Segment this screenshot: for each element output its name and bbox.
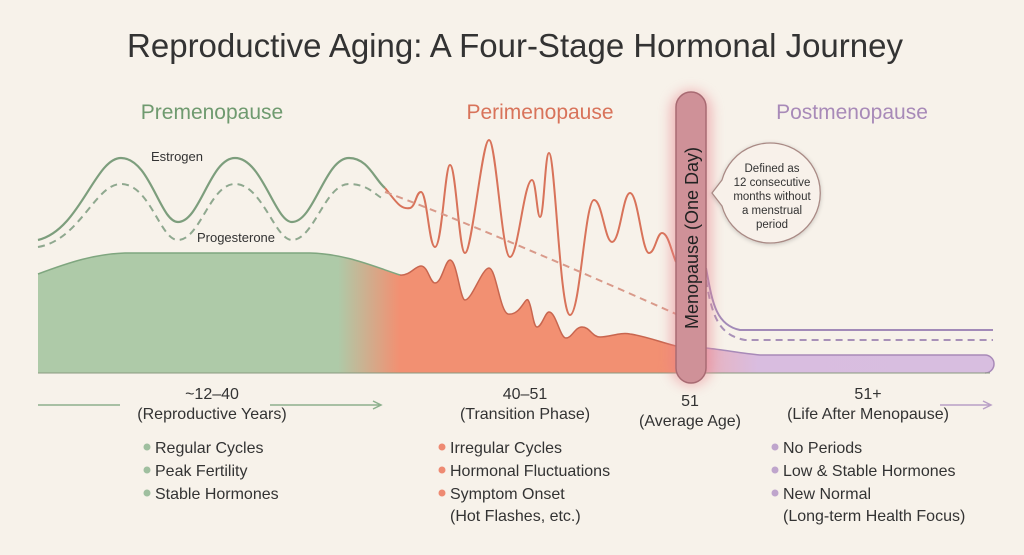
bullets: perimenopause [438,440,610,525]
stage label: perimenopause ages [460,386,590,423]
stage label: perimenopause ages: 40–51 [503,386,547,403]
bullets: premenopause: Peak Fertility [155,463,247,480]
heading: premenopause: Premenopause [141,101,283,124]
bullets: premenopause: Stable Hormones [155,486,279,503]
stage label: menopause age [639,393,741,430]
bullets: postmenopause: New Normal [783,486,871,503]
menopause bar [670,90,712,386]
heading: postmenopause: Postmenopause [776,101,928,124]
progesterone dashed red [385,192,676,314]
bullets: postmenopause: No Periods [783,440,862,457]
timeline arrow green [38,401,381,409]
timeline arrow purple [940,401,991,409]
title: Reproductive Aging: A Four-Stage Hormonal Journey [127,27,903,64]
stage label: postmenopause ages [787,386,949,423]
label: progesterone: Progesterone [197,230,275,245]
stage label: postmenopause ages: (Life After Menopause) [787,406,949,423]
estrogen line red [385,140,676,315]
callout: a menstrual [742,205,802,217]
bullets: postmenopause [772,440,965,525]
callout [712,143,820,243]
bullets: postmenopause: (Long-term Health Focus) [783,508,965,525]
label: estrogen: Estrogen [151,149,203,164]
stage label: perimenopause ages: (Transition Phase) [460,406,590,423]
callout: period [756,219,788,231]
progesterone fill area [38,253,994,373]
callout: 12 consecutive [734,177,810,189]
postmenopause estrogen line [706,268,993,330]
bullets: perimenopause: Hormonal Fluctuations [450,463,610,480]
stage label: postmenopause ages: 51+ [854,386,882,403]
stage label: premenopause ages [137,386,287,423]
postmenopause progesterone dashed [706,280,993,340]
bullets: postmenopause: Low & Stable Hormones [783,463,956,480]
menopause bar: Menopause (One Day) [682,147,702,329]
stage label: menopause age: (Average Age) [639,413,741,430]
heading: perimenopause: Perimenopause [466,101,614,124]
stage label: premenopause ages: (Reproductive Years) [137,406,287,423]
bullets: perimenopause: (Hot Flashes, etc.) [450,508,581,525]
progesterone dashed green [38,184,385,247]
stage label: premenopause ages: ~12–40 [185,386,239,403]
bullets: perimenopause: Irregular Cycles [450,440,562,457]
bullets: premenopause [144,440,279,503]
stage label: menopause age: 51 [681,393,699,410]
estrogen line green [38,158,385,240]
callout: months without [733,191,811,203]
bullets: premenopause: Regular Cycles [155,440,263,457]
callout: Defined as [745,163,800,175]
bullets: perimenopause: Symptom Onset [450,486,565,503]
